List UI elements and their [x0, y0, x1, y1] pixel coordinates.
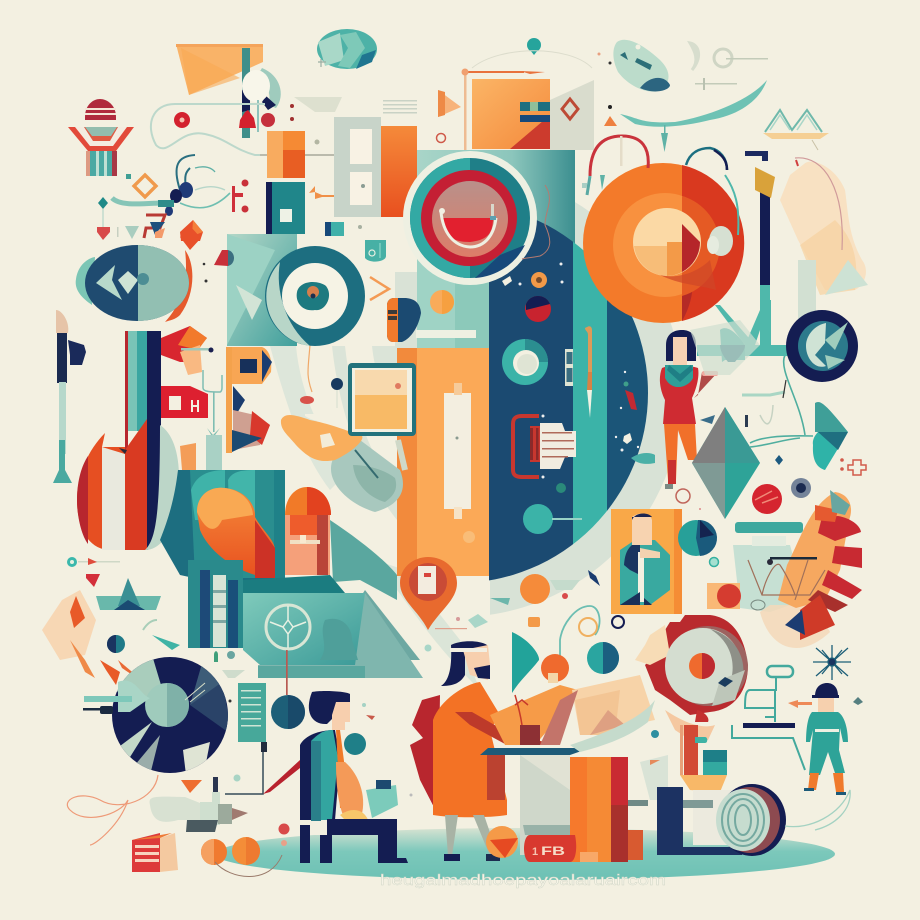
- icons: middle lower ornaments: [456, 570, 624, 693]
- panel: orange tabs mid left: [226, 347, 272, 453]
- panel: top centre mint wall: [395, 150, 575, 350]
- chart: grey teal diamond: [692, 405, 773, 519]
- icon: swoosh and top-right marks: [318, 40, 768, 152]
- icon: eye shape left: [76, 226, 234, 325]
- panel: orange big circle: [583, 163, 792, 375]
- icon: teal arrowhead right: [742, 355, 848, 470]
- pale swooshes behind the scene: [234, 169, 682, 690]
- figure: portrait card: [611, 509, 682, 614]
- icon: small boat and pendant: [67, 557, 161, 610]
- small ball and bar: [416, 290, 476, 338]
- figure: seated man: [300, 691, 412, 863]
- sparkles on right navy: [615, 371, 655, 464]
- ground ellipse: [215, 828, 835, 880]
- panel: orange slab: [397, 348, 489, 576]
- icon: lollipop: [523, 504, 582, 534]
- panel: orange gear right: [707, 490, 862, 648]
- icon: cloud blob top: [317, 29, 377, 69]
- gear: red saw: [635, 615, 748, 740]
- panel: screen tablet: [281, 345, 416, 512]
- chart: green list tablet: [225, 683, 300, 794]
- icon: hooks above orange circle: [582, 136, 738, 235]
- ring: red smile badge: [403, 151, 537, 285]
- big circle: centre: [387, 200, 655, 590]
- icon: paired triangles top right: [763, 110, 829, 150]
- panel: building stripes: [188, 560, 243, 648]
- icon: red clamp comb: [513, 414, 576, 493]
- icon: dark lens right: [786, 310, 858, 382]
- chart: big striped J: [77, 331, 179, 550]
- figure: worker in teal: [788, 683, 863, 795]
- icon: wire and insect: [112, 104, 420, 238]
- stack: orange boxes and machine: [524, 725, 742, 862]
- watermark text: heugalmadhoepayoalaruaircom: [380, 872, 666, 889]
- icon: striped tower: [68, 99, 134, 176]
- panel: compass console: [243, 575, 423, 695]
- icon: pendulum ball: [271, 695, 305, 729]
- panel: teal block with orange heart: [160, 470, 397, 600]
- icon: half shield: [387, 298, 421, 342]
- figure: woman in red: [660, 330, 718, 510]
- icon: teal tag: [365, 240, 389, 300]
- icon: hand tool: [150, 774, 248, 832]
- icon: small left glyphs: [97, 174, 248, 241]
- panel: top centre orange box: [436, 38, 617, 150]
- badge: orange pin: [400, 557, 457, 630]
- icon: coil wheel: [716, 784, 850, 856]
- chart: red crate and balls: [132, 824, 290, 877]
- panel: hammer and cloth: [745, 151, 868, 350]
- icon: left foliage cluster: [42, 590, 180, 687]
- panel: top left orange kite: [174, 44, 294, 138]
- dots and mini icons on navy: [502, 262, 573, 386]
- figure: bearded person at table: [410, 628, 655, 861]
- stack: orange boxes and machine: 1: [532, 846, 538, 858]
- panel: teal target: [227, 234, 365, 346]
- icon: brush post left: [53, 310, 86, 483]
- wire squiggle: [522, 185, 550, 259]
- blocks: upper left of centre: [266, 97, 417, 236]
- icon: brush: [585, 326, 592, 418]
- icon: red ball and burst: [752, 455, 866, 514]
- disc: record: [67, 651, 245, 845]
- icons: disc beside card: [678, 520, 718, 566]
- icon: starburst lower right: [813, 645, 851, 680]
- icon: red flags beside J: [161, 326, 222, 470]
- stack: orange boxes and machine: FB: [541, 844, 565, 858]
- icon: teal bench machine: [732, 666, 805, 770]
